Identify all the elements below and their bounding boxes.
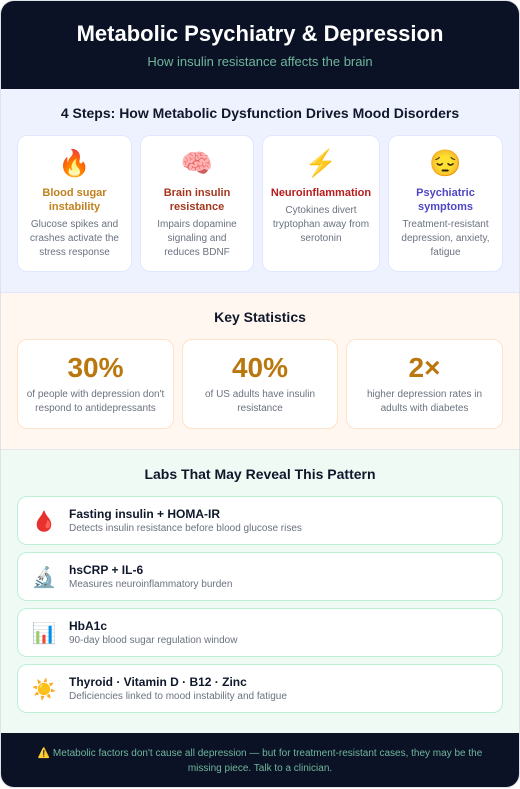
step description: serotonin (300, 233, 342, 244)
step description: Treatment-resistant (402, 219, 489, 230)
title: Metabolic Psychiatry & Depression (77, 21, 443, 46)
stat description: of people with depression don't (27, 389, 164, 400)
lab description: Deficiencies linked to mood instability and fatigue (69, 691, 287, 702)
lab name: HbA1c (69, 619, 107, 633)
step title: instability (49, 201, 100, 213)
stat description: of US adults have insulin (205, 389, 315, 400)
icon: fire: 🔥 (58, 148, 91, 178)
panel: key statistics (1, 293, 519, 450)
number: 2× (409, 352, 440, 383)
step title (42, 187, 107, 213)
heading: key statistics: Key Statistics (214, 309, 306, 325)
stat description: resistance (237, 403, 283, 414)
lab description: Measures neuroinflammatory burden (69, 579, 232, 590)
stat description: adults with diabetes (381, 403, 468, 414)
step description: reduces BDNF (164, 247, 230, 258)
number: 40% (232, 352, 288, 383)
stat description (27, 389, 164, 414)
step description (30, 219, 119, 258)
lab row: hsCRP (17, 552, 503, 601)
step description: fatigue (430, 247, 461, 258)
stat description: higher depression rates in (367, 389, 482, 400)
header (1, 1, 519, 89)
stat description (205, 389, 315, 414)
step description: Impairs dopamine (157, 219, 237, 230)
lab row: fasting insulin (17, 496, 503, 545)
panel: four steps (1, 89, 519, 293)
footer note (1, 733, 519, 788)
step description (401, 219, 490, 258)
step card: brain insulin resistance (140, 135, 254, 272)
step title: Brain insulin (164, 187, 230, 199)
step card: blood sugar instability (17, 135, 132, 272)
number: 30% (67, 352, 124, 383)
icon: microscope: 🔬 (32, 567, 56, 589)
step description: signaling and (168, 233, 226, 244)
step description: crashes activate the (30, 233, 119, 244)
icon: bar chart: 📊 (32, 623, 56, 645)
step description: Cytokines divert (285, 205, 357, 216)
icon: lightning: ⚡ (305, 148, 337, 178)
step title (164, 187, 230, 213)
lab name: hsCRP + IL-6 (69, 563, 143, 577)
stat description: respond to antidepressants (35, 403, 156, 414)
step description (157, 219, 237, 258)
lab name: Fasting insulin + HOMA-IR (69, 507, 220, 521)
stat card: 30% (17, 339, 174, 429)
lab row: thyroid and vitamins (17, 664, 503, 713)
step description: stress response (39, 247, 110, 258)
step description: depression, anxiety, (401, 233, 490, 244)
subtitle: How insulin resistance affects the brain (147, 54, 373, 69)
step title: Neuroinflammation (271, 187, 371, 199)
heading: four steps: 4 Steps: How Metabolic Dysfunction Drives Mood Disorders (61, 105, 459, 121)
step card: psychiatric symptoms (388, 135, 503, 272)
step title: Blood sugar (42, 187, 107, 199)
step description: Glucose spikes and (31, 219, 118, 230)
icon: sun: ☀️ (32, 679, 56, 701)
stat card: 2x (346, 339, 503, 429)
step description (273, 205, 369, 244)
icon: brain: 🧠 (181, 148, 213, 178)
stat description (367, 389, 482, 414)
heading: labs: Labs That May Reveal This Pattern (144, 466, 376, 482)
footer note: ⚠️ Metabolic factors don't cause all depression — but for treatment-resistant cases, they may be the missing piece. Talk to a clinician. (38, 748, 482, 774)
lab description: 90-day blood sugar regulation window (69, 635, 237, 646)
step title: resistance (170, 201, 224, 213)
lab description: Detects insulin resistance before blood glucose rises (69, 523, 302, 534)
step description: tryptophan away from (273, 219, 369, 230)
panel: labs (1, 450, 519, 734)
step title (416, 187, 475, 213)
lab row: HbA1c (17, 608, 503, 657)
step card: neuroinflammation (262, 135, 380, 272)
step title: symptoms (418, 201, 473, 213)
stat card: 40% (182, 339, 338, 429)
icon: pensive face: 😔 (429, 148, 462, 178)
lab name: Thyroid · Vitamin D · B12 · Zinc (69, 675, 247, 689)
step title: Psychiatric (416, 187, 475, 199)
icon: blood drop: 🩸 (32, 511, 56, 533)
